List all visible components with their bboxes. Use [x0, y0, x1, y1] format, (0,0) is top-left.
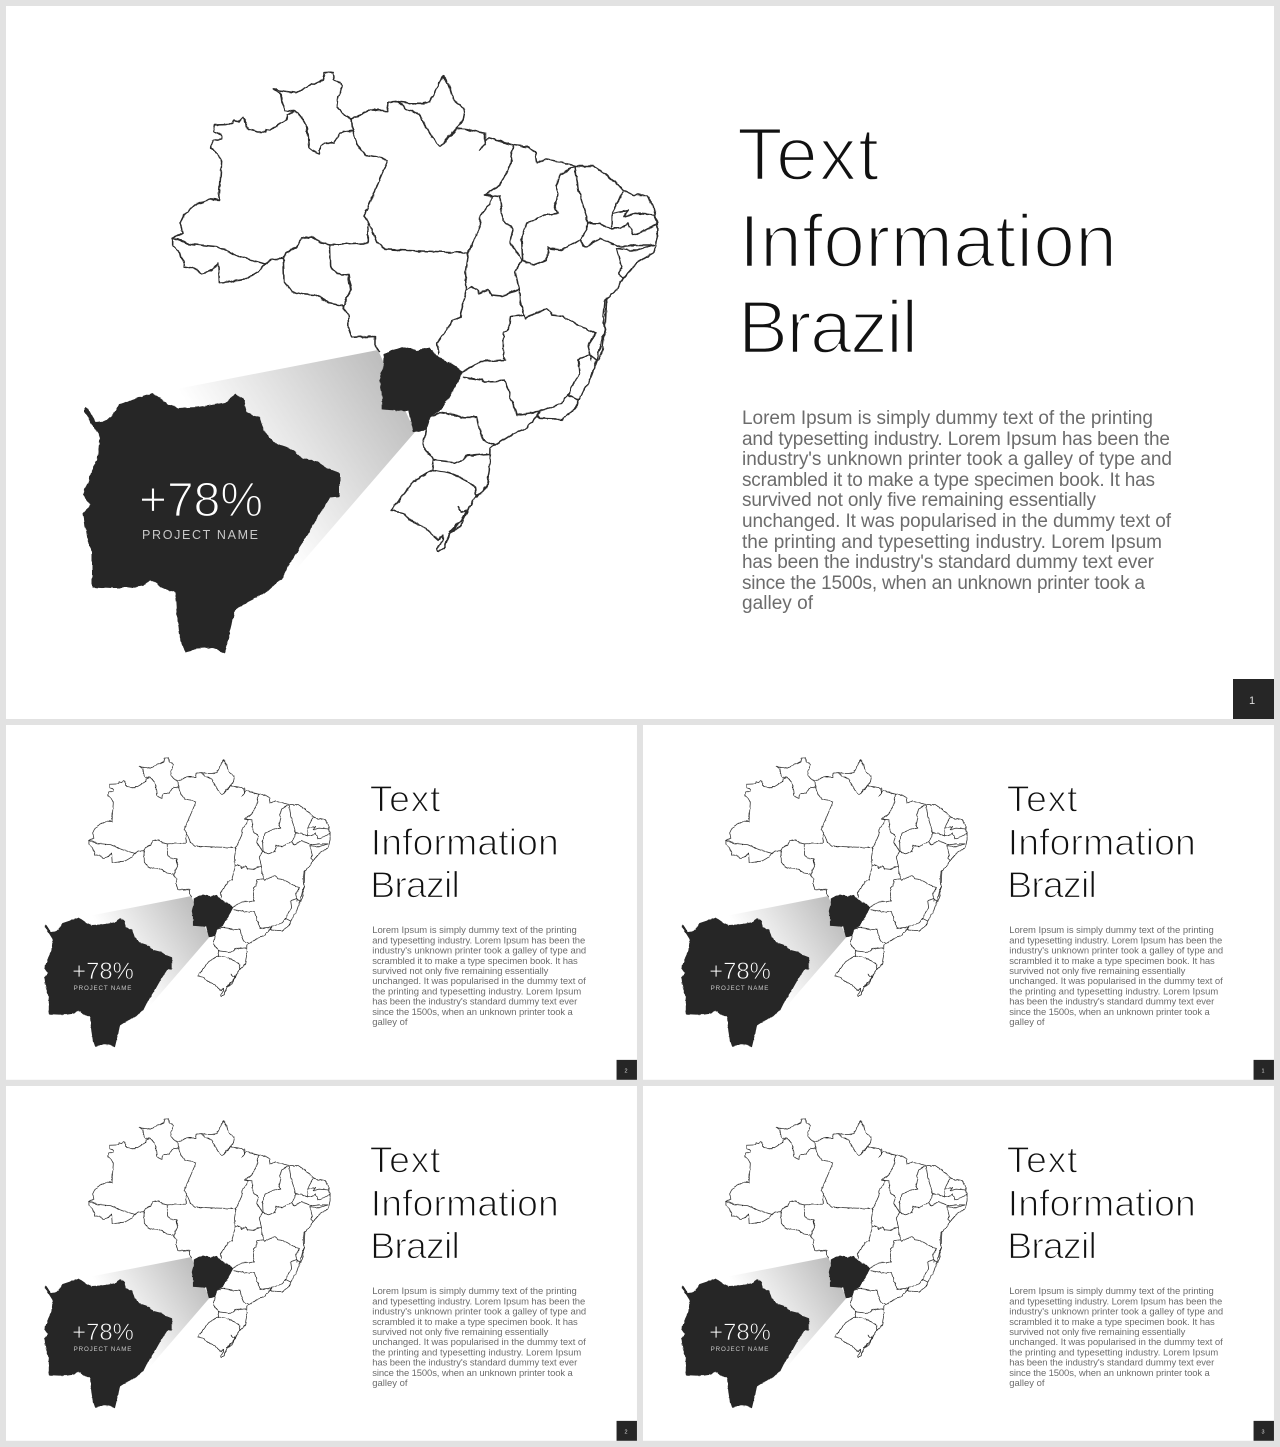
callout label: PROJECT NAME: [711, 985, 768, 992]
body text: and typesetting industry. Lorem Ipsum has been the: [1009, 935, 1222, 946]
title: Information: [1008, 821, 1196, 863]
body text: since the 1500s, when an unknown printer took a: [1009, 1368, 1211, 1379]
body text: Lorem Ipsum is simply dummy text of the printing: [372, 925, 577, 936]
title: Text: [1007, 1139, 1078, 1181]
body text: unchanged. It was popularised in the dummy text of: [372, 1337, 586, 1348]
title: [1007, 1139, 1196, 1267]
body text: [372, 1286, 586, 1389]
body text: [1009, 925, 1223, 1028]
title: Information: [739, 199, 1117, 283]
enlarged state shape: [44, 918, 172, 1047]
enlarged state shape: [681, 1279, 809, 1408]
title: Brazil: [1007, 864, 1097, 906]
map of Brazil: [89, 758, 330, 997]
body text: the printing and typesetting industry. Lorem Ipsum: [372, 1348, 581, 1359]
body text: industry's unknown printer took a galley of type and: [742, 449, 1172, 470]
title: Information: [371, 821, 559, 863]
body text: and typesetting industry. Lorem Ipsum has been the: [1009, 1296, 1222, 1307]
callout label: PROJECT NAME: [711, 1346, 768, 1353]
page number: [1233, 679, 1274, 719]
body text: has been the industry's standard dummy text ever: [1009, 1358, 1214, 1369]
title: Text: [370, 778, 441, 820]
callout value: +78%: [709, 1319, 771, 1346]
body text: survived not only five remaining essentially: [1009, 1327, 1186, 1338]
callout label: PROJECT NAME: [74, 985, 131, 992]
slide 2: [6, 725, 637, 1080]
page number: 3: [1261, 1429, 1265, 1435]
slide 5: [643, 1086, 1274, 1441]
body text: survived not only five remaining essentially: [742, 490, 1096, 511]
body text: scrambled it to make a type specimen book. It has: [372, 956, 578, 967]
title: [370, 778, 559, 906]
enlarged state shape: [44, 1279, 172, 1408]
body text: since the 1500s, when an unknown printer took a: [742, 573, 1145, 594]
body text: galley of: [742, 593, 814, 614]
body text: unchanged. It was popularised in the dummy text of: [742, 511, 1172, 532]
callout cone: [682, 1257, 847, 1409]
body text: has been the industry's standard dummy text ever: [742, 552, 1155, 573]
body text: Lorem Ipsum is simply dummy text of the printing: [1009, 925, 1214, 936]
body text: the printing and typesetting industry. Lorem Ipsum: [1009, 987, 1218, 998]
callout value: +78%: [709, 958, 771, 985]
map of Brazil: [89, 1119, 330, 1358]
body text: scrambled it to make a type specimen book. It has: [742, 470, 1155, 491]
enlarged state shape: [681, 918, 809, 1047]
body text: since the 1500s, when an unknown printer took a: [372, 1007, 574, 1018]
body text: survived not only five remaining essentially: [372, 1327, 549, 1338]
page number: [617, 1060, 637, 1080]
callout label: PROJECT NAME: [142, 528, 258, 542]
body text: galley of: [372, 1017, 408, 1028]
body text: has been the industry's standard dummy text ever: [372, 1358, 577, 1369]
body text: and typesetting industry. Lorem Ipsum has been the: [742, 429, 1170, 450]
title: Brazil: [738, 285, 918, 369]
body text: galley of: [1009, 1378, 1045, 1389]
page number: 1: [1249, 695, 1255, 707]
callout cone: [682, 896, 847, 1048]
body text: has been the industry's standard dummy text ever: [1009, 997, 1214, 1008]
body text: Lorem Ipsum is simply dummy text of the printing: [372, 1286, 577, 1297]
title: Information: [1008, 1182, 1196, 1224]
body text: survived not only five remaining essentially: [372, 966, 549, 977]
title: Information: [371, 1182, 559, 1224]
body text: industry's unknown printer took a galley of type and: [372, 1306, 586, 1317]
body text: scrambled it to make a type specimen book. It has: [1009, 956, 1215, 967]
title: Text: [370, 1139, 441, 1181]
body text: industry's unknown printer took a galley of type and: [372, 945, 586, 956]
body text: the printing and typesetting industry. Lorem Ipsum: [1009, 1348, 1218, 1359]
title: Text: [1007, 778, 1078, 820]
body text: [1009, 1286, 1223, 1389]
title: [370, 1139, 559, 1267]
body text: since the 1500s, when an unknown printer took a: [1009, 1007, 1211, 1018]
title: Brazil: [1007, 1225, 1097, 1267]
page number: [1254, 1421, 1274, 1441]
body text: has been the industry's standard dummy text ever: [372, 997, 577, 1008]
body text: since the 1500s, when an unknown printer took a: [372, 1368, 574, 1379]
body text: and typesetting industry. Lorem Ipsum has been the: [372, 1296, 585, 1307]
map of Brazil: [726, 1119, 967, 1358]
body text: galley of: [372, 1378, 408, 1389]
body text: unchanged. It was popularised in the dummy text of: [372, 976, 586, 987]
page number: [617, 1421, 637, 1441]
body text: scrambled it to make a type specimen book. It has: [372, 1317, 578, 1328]
callout value: +78%: [139, 474, 263, 527]
body text: survived not only five remaining essentially: [1009, 966, 1186, 977]
slide 3: [643, 725, 1274, 1080]
map of Brazil: [726, 758, 967, 997]
body text: industry's unknown printer took a galley of type and: [1009, 945, 1223, 956]
body text: the printing and typesetting industry. Lorem Ipsum: [372, 987, 581, 998]
callout cone: [85, 350, 415, 655]
body text: industry's unknown printer took a galley of type and: [1009, 1306, 1223, 1317]
slide 1: large: [6, 6, 1274, 719]
callout label: PROJECT NAME: [74, 1346, 131, 1353]
callout value: +78%: [72, 958, 134, 985]
body text: the printing and typesetting industry. Lorem Ipsum: [742, 532, 1162, 553]
title: Brazil: [370, 864, 460, 906]
body text: [742, 408, 1172, 614]
title: [1007, 778, 1196, 906]
body text: galley of: [1009, 1017, 1045, 1028]
page number: 2: [624, 1068, 628, 1074]
body text: Lorem Ipsum is simply dummy text of the printing: [742, 408, 1153, 429]
enlarged state shape: [83, 393, 340, 653]
map of Brazil: [173, 72, 657, 552]
body text: unchanged. It was popularised in the dummy text of: [1009, 1337, 1223, 1348]
callout cone: [45, 1257, 210, 1409]
page number: 1: [1261, 1068, 1265, 1074]
body text: Lorem Ipsum is simply dummy text of the printing: [1009, 1286, 1214, 1297]
callout cone: [45, 896, 210, 1048]
body text: unchanged. It was popularised in the dummy text of: [1009, 976, 1223, 987]
page number: [1254, 1060, 1274, 1080]
body text: scrambled it to make a type specimen book. It has: [1009, 1317, 1215, 1328]
page number: 2: [624, 1429, 628, 1435]
body text: [372, 925, 586, 1028]
slide 4: [6, 1086, 637, 1441]
body text: and typesetting industry. Lorem Ipsum has been the: [372, 935, 585, 946]
title: Text: [737, 112, 879, 196]
callout value: +78%: [72, 1319, 134, 1346]
title: [737, 112, 1117, 369]
title: Brazil: [370, 1225, 460, 1267]
